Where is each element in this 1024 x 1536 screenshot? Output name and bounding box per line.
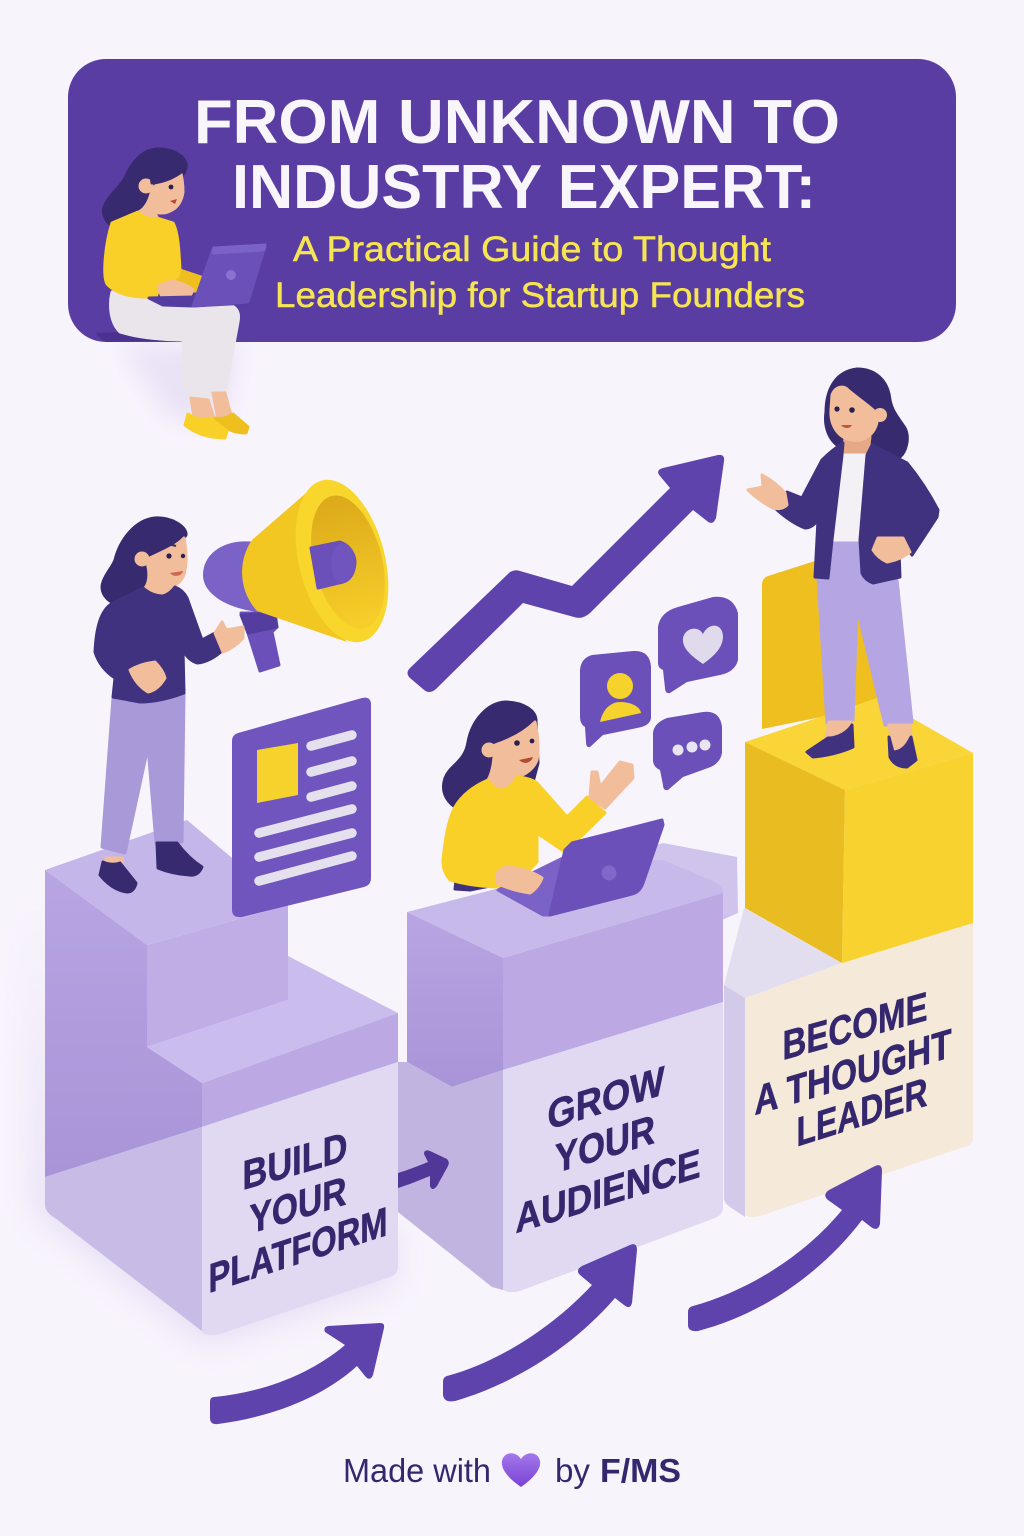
block label: GROW: [548, 1057, 665, 1139]
arrow: between blocks: [398, 1150, 449, 1189]
title: INDUSTRY EXPERT:: [232, 153, 816, 222]
block label: [754, 983, 952, 1155]
footer credit: [343, 1452, 681, 1489]
block label: [208, 1123, 388, 1302]
arrow: growth trend: [408, 455, 724, 692]
footer credit: by: [555, 1452, 590, 1489]
block 1: build your platform: [45, 820, 398, 1335]
shadow beneath seated figure: [120, 345, 240, 420]
block label: BECOME: [782, 983, 928, 1069]
person: at laptop with audience: [443, 702, 663, 915]
footer credit: F/MS: [600, 1452, 681, 1489]
footer credit: Made with: [343, 1452, 491, 1489]
icon: heart bubble: [658, 597, 738, 693]
header banner: [68, 59, 956, 342]
icon: document: [232, 698, 371, 917]
arrow: step three: [688, 1165, 882, 1331]
person: standing with megaphone: [95, 518, 243, 892]
block label: YOUR: [250, 1167, 346, 1243]
block label: AUDIENCE: [516, 1140, 700, 1242]
yellow cube: [745, 698, 973, 790]
icon: heart: [502, 1453, 540, 1487]
subtitle: [275, 230, 805, 315]
block label: YOUR: [555, 1106, 655, 1182]
block 3: become a thought leader: [724, 561, 973, 1217]
block label: [516, 1057, 700, 1242]
person: thought leader on top: [748, 369, 938, 767]
subtitle: Leadership for Startup Founders: [275, 276, 805, 315]
icon: megaphone: [203, 470, 404, 671]
block label: A THOUGHT: [754, 1020, 952, 1124]
block label: LEADER: [796, 1068, 928, 1155]
title: [194, 88, 840, 222]
soft shadow of blocks: [34, 900, 395, 1345]
block 2: grow your audience: [398, 843, 738, 1292]
block label: BUILD: [242, 1123, 348, 1199]
block label: PLATFORM: [208, 1198, 388, 1302]
subtitle: A Practical Guide to Thought: [293, 230, 771, 269]
title: FROM UNKNOWN TO: [194, 88, 840, 157]
back yellow column: [762, 561, 900, 729]
person: founder with laptop on banner: [104, 149, 265, 438]
icon: profile bubble: [580, 651, 651, 747]
arrow: step two: [443, 1244, 637, 1401]
icon: chat bubble: [653, 712, 722, 790]
arrow: step one: [210, 1323, 384, 1424]
